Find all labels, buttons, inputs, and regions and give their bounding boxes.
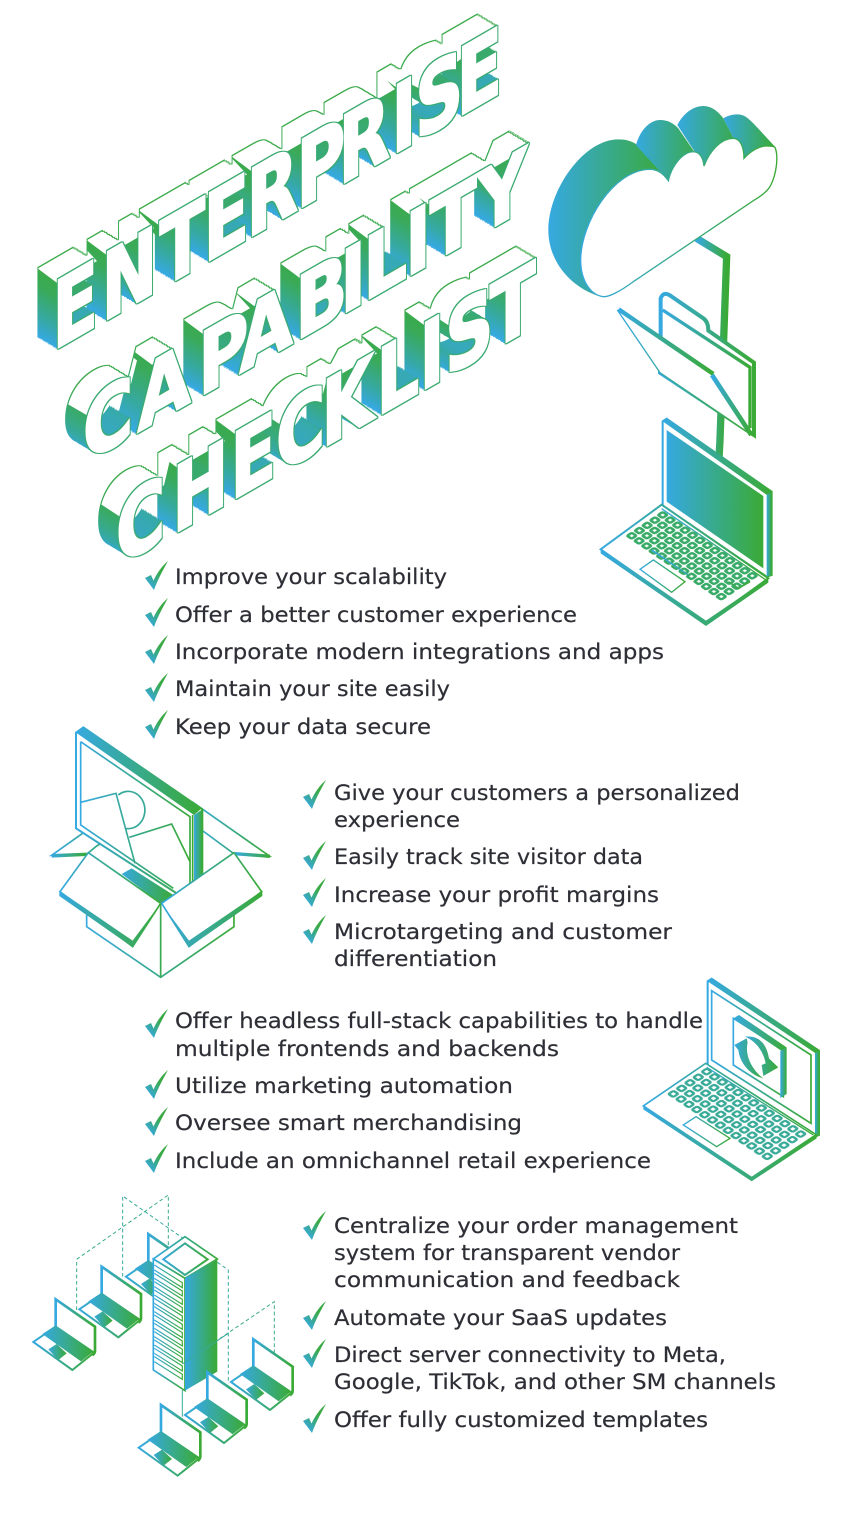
- item: order management: system for transparent vendor: [334, 1241, 680, 1266]
- illustration: cloud, folder and laptop: [548, 106, 777, 626]
- checklist: section 3: [145, 1009, 703, 1174]
- title line: ENTERPRISE: ENTERPRISE: [53, 6, 502, 372]
- item: order management: Centralize your order management: [334, 1214, 738, 1239]
- item: headless: multiple frontends and backends: [175, 1037, 559, 1062]
- title line: CHECKLIST: CHECKLIST: [116, 241, 535, 588]
- item: integrations: Incorporate modern integrations and apps: [175, 640, 664, 665]
- item: server connectivity: [303, 1339, 776, 1395]
- title line: ENTERPRISE: ENTERPRISE: [53, 6, 502, 372]
- item: microtargeting: [303, 915, 672, 972]
- title line: CAPABILITY: CAPABILITY: [83, 129, 528, 484]
- item: profit margins: Increase your profit margins: [334, 883, 659, 908]
- title: [53, 6, 535, 588]
- checklist: section 1: [145, 561, 664, 740]
- icon: open box: [59, 853, 262, 977]
- item: server connectivity: Direct server connectivity to Meta,: [334, 1343, 726, 1368]
- title line: CHECKLIST: CHECKLIST: [116, 241, 535, 588]
- item: customer experience: Offer a better customer experience: [175, 603, 577, 628]
- icon: laptop back row: [126, 1234, 188, 1305]
- title line: CHECKLIST: CHECKLIST: [116, 241, 535, 588]
- item: secure: Keep your data secure: [175, 715, 431, 740]
- item: server connectivity: Google, TikTok, and other SM channels: [334, 1370, 776, 1395]
- item: microtargeting: Microtargeting and customer: [334, 920, 672, 945]
- icon: laptop screen: [708, 979, 819, 1137]
- checklist: section 2: [303, 780, 740, 972]
- icon: sync panel: [733, 1015, 787, 1098]
- item: SaaS updates: Automate your SaaS updates: [334, 1306, 667, 1331]
- item: personalized experience: Give your customers a personalized: [334, 781, 740, 806]
- icon: folder: [617, 294, 754, 435]
- item: visitor data: Easily track site visitor data: [334, 845, 643, 870]
- title line: CAPABILITY: CAPABILITY: [83, 129, 528, 484]
- icon: laptop right: [231, 1339, 293, 1410]
- item: order management: communication and feedback: [334, 1268, 681, 1293]
- item: templates: Offer fully customized templates: [334, 1408, 708, 1433]
- icon: back flaps: [52, 803, 270, 858]
- item: omnichannel: Include an omnichannel retail experience: [175, 1149, 651, 1174]
- icon: laptop lower middle: [185, 1372, 247, 1443]
- illustration: picture in open box: [52, 727, 270, 977]
- icon: cloud: [548, 106, 777, 297]
- dashed connector lines: [77, 1195, 274, 1383]
- illustration: server network: [33, 1195, 293, 1476]
- icon: laptop bottom: [139, 1405, 200, 1476]
- item: personalized experience: experience: [334, 808, 460, 833]
- icon: server tower: [153, 1237, 228, 1417]
- illustration: laptop with sync icon: [643, 979, 819, 1181]
- checklist: section 4: [303, 1211, 776, 1433]
- item: headless: [145, 1009, 703, 1062]
- item: marketing automation: Utilize marketing automation: [175, 1074, 513, 1099]
- item: order management: [303, 1211, 738, 1293]
- item: scalability: Improve your scalability: [175, 565, 447, 590]
- title line: CAPABILITY: CAPABILITY: [83, 129, 528, 484]
- icon: laptop middle left: [79, 1267, 141, 1337]
- icon: picture frame: [76, 727, 202, 893]
- icon: connector line: [697, 238, 727, 503]
- icon: laptop base: [643, 1063, 817, 1181]
- icon: top laptop: [601, 419, 772, 626]
- icon: laptop front left: [33, 1299, 95, 1370]
- item: maintain: Maintain your site easily: [175, 677, 450, 702]
- item: merchandising: Oversee smart merchandising: [175, 1111, 522, 1136]
- title line: ENTERPRISE: ENTERPRISE: [53, 6, 502, 372]
- item: personalized experience: [303, 780, 740, 833]
- item: microtargeting: differentiation: [334, 947, 497, 972]
- item: headless: Offer headless full-stack capabilities to handle: [175, 1009, 703, 1034]
